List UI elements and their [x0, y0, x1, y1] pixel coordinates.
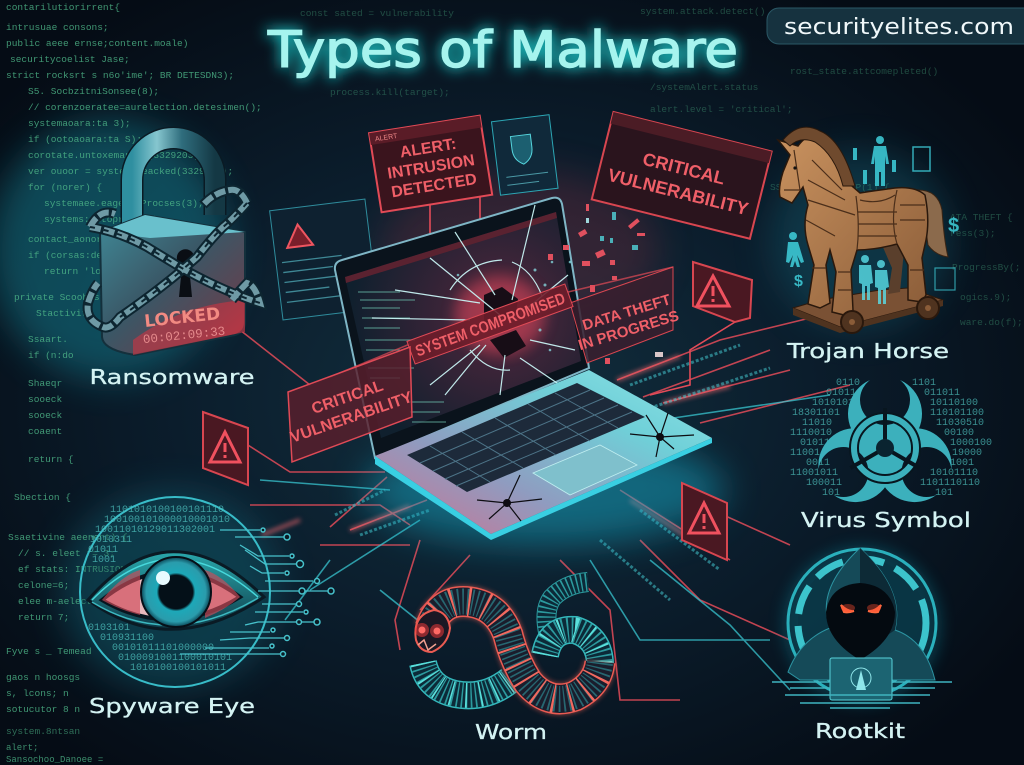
panel: alert intrusion detected	[369, 116, 492, 212]
icon: trojan horse	[778, 127, 959, 333]
code text: left column: ver ouoor = systemcteacked(3329208);	[28, 166, 233, 177]
trackpad	[533, 445, 637, 495]
icon: virus symbol: 1000100	[950, 438, 992, 449]
banner: system compromised: SYSTEM COMPROMISED	[413, 290, 568, 360]
title: Types of Malware	[267, 21, 738, 79]
icon: virus symbol: 1010101	[812, 398, 854, 409]
icon: virus symbol: 110101100	[930, 408, 984, 419]
chains	[88, 190, 260, 328]
icon: virus symbol: 01011	[800, 438, 830, 449]
code text: right column: ProgressBy(;	[952, 262, 1020, 273]
worm tail lower	[423, 663, 510, 695]
panel: alert intrusion detected: DETECTED	[390, 171, 478, 201]
worm body upper teal	[545, 582, 600, 665]
code text: left column: celone=6;	[18, 580, 69, 591]
code text: left column: if (corsas:detal	[28, 250, 120, 261]
panel: shield window	[491, 115, 558, 195]
icon: ransomware lock	[88, 138, 260, 355]
code text: left column: intrusuae consons;	[6, 22, 109, 33]
icon: spyware eye: 100100101000010001010	[104, 515, 230, 526]
body	[100, 215, 245, 355]
code text: left column: sotucutor 8 n	[6, 704, 80, 715]
code text: left column: Shaeqr	[28, 378, 62, 389]
code text: left column: systemaee.eage.reProcses(3);	[44, 198, 204, 209]
code text: left column: public aeee ernse;content.moale)	[6, 38, 188, 49]
icon: virus symbol: 0011	[806, 458, 830, 469]
circuit lines	[240, 190, 850, 700]
icon: warning top right	[693, 262, 752, 322]
icon: spyware eye: 00101011101000000	[112, 643, 214, 654]
code text: left column: Stactivit	[36, 308, 87, 319]
icon: spyware eye: 1101010100100101110	[110, 505, 224, 516]
locked display: LOCKED	[143, 304, 221, 332]
code text: right column: /systemAlert.status	[650, 82, 758, 93]
far legs	[882, 240, 905, 294]
label: rootkit: Rootkit	[815, 719, 905, 743]
code text: left column: ef stats: INTRUSION_DETECTED());	[18, 564, 200, 575]
code text: left column: contact_aonor;	[28, 234, 108, 245]
panel: critical vulnerability top: CRITICAL	[641, 149, 727, 189]
icon: virus symbol: 18301101	[792, 408, 840, 419]
label: trojan horse: Trojan Horse	[786, 339, 949, 363]
icon: virus symbol: 11001011	[790, 468, 838, 479]
icon: virus symbol: 1001	[950, 458, 974, 469]
icon: spyware eye: 0103101	[88, 623, 130, 634]
code text: right column	[300, 6, 1023, 328]
eye shape	[88, 552, 264, 629]
code text: left column: return 7;	[18, 612, 69, 623]
icon: virus symbol: 10101110	[930, 468, 978, 479]
code text: left column: s, lcons; n	[6, 688, 69, 699]
code text: right column: rost_state.attcomepleted()	[790, 66, 938, 77]
icon: virus symbol: 100011	[806, 478, 842, 489]
code text: left column: return {	[28, 454, 74, 465]
wheels	[841, 311, 863, 333]
mane	[783, 127, 855, 186]
code text: right column: system.attack.detect()	[640, 6, 765, 17]
code text: left column: system.8ntsan	[6, 726, 80, 737]
icon: worm	[415, 582, 600, 699]
icon: spyware eye	[80, 497, 334, 687]
icon: virus symbol: 1110010	[790, 428, 832, 439]
icon: spyware eye: 010931100	[100, 633, 154, 644]
code text: left column: sooeck	[28, 394, 63, 405]
icon: virus symbol: 0110	[836, 378, 860, 389]
code text: left column: S5. SocbzitniSonsee(8);	[28, 86, 159, 97]
code text: left column: contarilutiorirrent{	[6, 2, 120, 13]
label: virus symbol: Virus Symbol	[801, 508, 971, 532]
code text: left column: return 'losg	[44, 266, 112, 277]
icon: warning left	[203, 412, 248, 485]
icon: virus symbol: 11001	[790, 448, 820, 459]
code text: left column: gaos n hoosgs	[6, 672, 80, 683]
code text: left column	[6, 2, 262, 737]
platform	[793, 288, 943, 327]
panel: laptop	[335, 198, 725, 545]
cracks	[477, 413, 694, 521]
badge: securityelites.com: securityelites.com	[784, 15, 1014, 40]
icon: virus symbol: 011011	[924, 388, 960, 399]
icon: warning bottom right	[682, 483, 727, 560]
code text: left column: Sbection {	[14, 492, 71, 503]
icon: spyware eye: 01011	[88, 545, 118, 556]
code text: right column: const sated = vulnerability	[300, 8, 454, 19]
code text: right column: alert.level = 'critical';	[650, 104, 793, 115]
code text: left column: systemaoara:ta 3);	[28, 118, 131, 129]
circuit traces	[180, 530, 328, 654]
code text: lower left: Sansochoo_Danoee =	[6, 755, 103, 765]
icon: spyware eye: 1010311	[90, 535, 132, 546]
laptop base	[375, 370, 712, 534]
code text: left column: securitycoelist Jase;	[10, 54, 130, 65]
icon: virus symbol: 101	[935, 488, 953, 499]
icon: virus symbol: 11010	[802, 418, 832, 429]
icon: virus symbol: 1101110110	[920, 478, 980, 489]
icon: trojan horse: $	[794, 273, 803, 290]
code text: left column: if (ootoaoara:ta S);	[28, 134, 142, 145]
tail	[918, 190, 948, 257]
code text: left column: private Scoobast	[14, 292, 105, 303]
icon: rootkit hooded figure	[772, 545, 952, 708]
banner: data theft in progress: IN PROGRESS	[576, 307, 681, 354]
code text: left column: Fyve s _ Temead	[6, 646, 92, 657]
human silhouettes	[786, 136, 896, 267]
code text: left column: elee m-aelect(-);	[18, 596, 115, 607]
code text: left column: // corenzoeratee=aurelection.detesimen();	[28, 102, 262, 113]
label: ransomware: Ransomware	[90, 365, 254, 389]
panel: alert intrusion detected: ALERT:	[399, 136, 458, 161]
keyboard	[407, 383, 645, 492]
code text: right column: SSS 9 AOOUNDSHIP(1) {	[770, 182, 890, 193]
code text: left column: for (norer) {	[28, 182, 102, 193]
code text: left column: corotate.untoxemarket(3329203);	[28, 150, 205, 161]
icon: virus symbol: 19000	[952, 448, 982, 459]
code text: right column: ATA THEFT {	[950, 212, 1013, 223]
code text: right column: ress(3);	[950, 228, 996, 239]
code text: left column: if (n:do	[28, 350, 74, 361]
panel: critical vulnerability left: CRITICAL	[309, 377, 386, 418]
icon: spyware eye: 1010100100101011	[130, 663, 226, 674]
icon: virus symbol	[790, 378, 992, 514]
body	[778, 135, 928, 316]
code text: right column: ogics.9);	[960, 292, 1011, 303]
label: worm: Worm	[475, 720, 547, 744]
icon: spyware eye: 1001	[92, 555, 116, 566]
label: spyware eye: Spyware Eye	[89, 694, 255, 718]
code text: left column: Ssaetivine aeenent) {	[8, 532, 128, 543]
icon: trojan horse: $	[948, 215, 959, 237]
title: Types of Malware	[267, 21, 738, 79]
code text: left column: sooeck	[28, 410, 63, 421]
worm body red	[430, 602, 600, 699]
icon: spyware eye: 10011010129011302001	[95, 525, 215, 536]
icon: virus symbol: 11030510	[936, 418, 984, 429]
worm head	[415, 610, 450, 652]
code text: left column: strict rocksrt s n6o'ime'; BR DETESDN3);	[6, 70, 234, 81]
badge: securityelites.com	[767, 8, 1024, 44]
banner: system compromised	[330, 267, 673, 377]
code text: right column: process.kill(target);	[330, 87, 450, 98]
code text: lower left: alert;	[6, 743, 38, 753]
glow: background accents	[0, 120, 950, 690]
figures inside	[859, 255, 889, 304]
panel: critical vulnerability left: VULNERABILITY	[288, 389, 415, 447]
icon: virus symbol: 10110100	[930, 398, 978, 409]
code text: left column: systems:intoproce(9);	[44, 214, 164, 225]
shackle	[132, 138, 215, 225]
laptop screen	[335, 198, 589, 458]
code text: left column: // s. eleet r= 3;	[18, 548, 115, 559]
banner: data theft in progress: DATA THEFT	[581, 291, 673, 334]
panel: critical vulnerability left	[288, 347, 415, 462]
code text: right column: ware.do(f);	[960, 317, 1023, 328]
debris	[548, 204, 663, 364]
banner: data theft in progress	[570, 267, 681, 363]
icon: virus symbol: 101	[822, 488, 840, 499]
panel: alert intrusion detected: ALERT	[375, 133, 399, 143]
icon: spyware eye: 0100091001100010101	[118, 653, 232, 664]
panel: critical vulnerability top	[592, 112, 772, 239]
panel: alert intrusion detected: INTRUSION	[386, 152, 476, 183]
code text: left column: Ssaart.	[28, 334, 68, 345]
icon: virus symbol: 00100	[944, 428, 974, 439]
locked display: 00:02:09:33	[142, 325, 226, 347]
panel: critical vulnerability top: VULNERABILITY	[606, 165, 750, 219]
panel: warning window left	[270, 199, 378, 320]
locked display	[140, 304, 226, 347]
icon: virus symbol: 01011	[826, 388, 856, 399]
code text: lower left	[6, 743, 103, 765]
icon: virus symbol: 1101	[912, 378, 936, 389]
code text: left column: coaent	[28, 426, 62, 437]
